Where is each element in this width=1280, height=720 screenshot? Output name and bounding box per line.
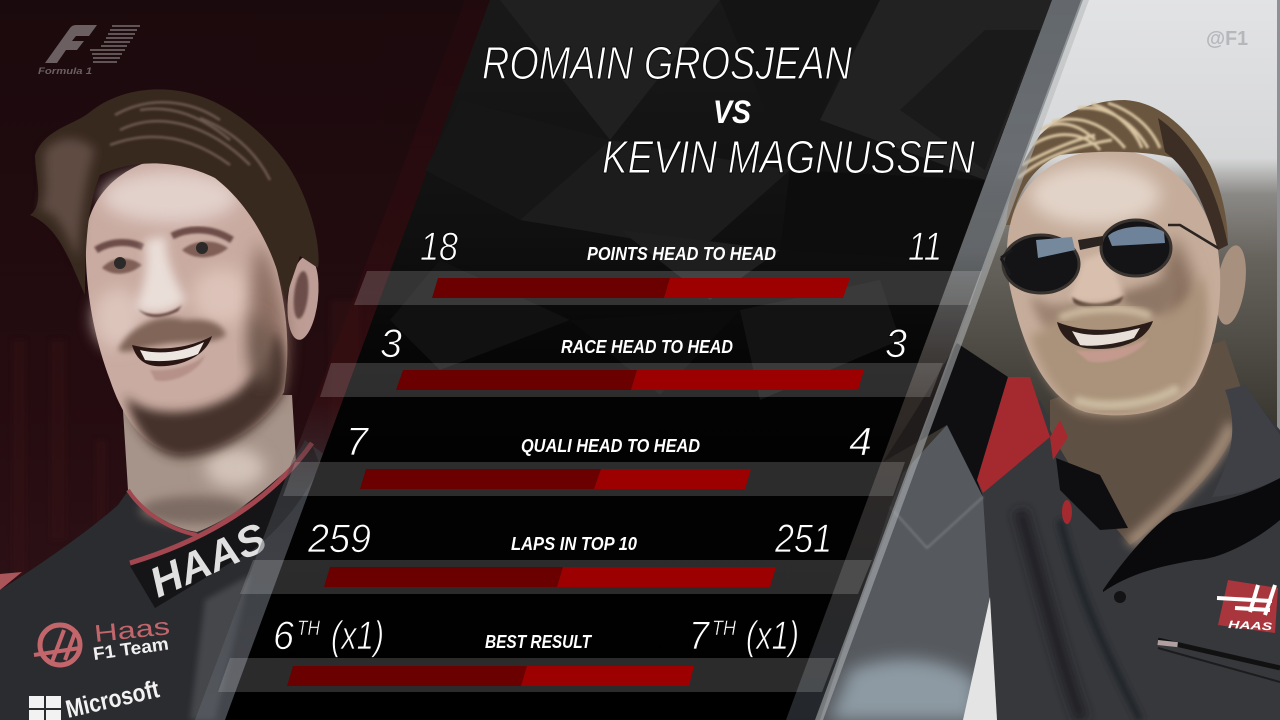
ear xyxy=(284,255,322,341)
row: laps in top 10: LAPS IN TOP 10 xyxy=(511,534,637,554)
logo: Formula 1: Formula 1 xyxy=(38,66,92,77)
sunglasses xyxy=(1001,220,1218,293)
chest logo xyxy=(1217,580,1278,633)
row: race head to head: 3 xyxy=(885,322,907,366)
hair xyxy=(30,89,319,300)
row: points head to head: 18 xyxy=(420,225,459,269)
ear xyxy=(1212,243,1250,327)
neck xyxy=(122,395,296,532)
row: quali head to head: QUALI HEAD TO HEAD xyxy=(521,436,700,456)
neck xyxy=(1050,340,1245,545)
row: quali head to head: 4 xyxy=(849,420,872,464)
row: best result: 6 xyxy=(273,614,295,658)
row: race head to head xyxy=(320,322,943,397)
suit logo: Microsoft xyxy=(29,675,162,720)
brows xyxy=(96,230,232,250)
row: best result: (x1) xyxy=(331,614,384,658)
row: laps in top 10 xyxy=(240,517,872,594)
right light strip xyxy=(815,0,1089,720)
title: Kevin Magnussen: KEVIN MAGNUSSEN xyxy=(602,131,976,183)
row: best result: TH xyxy=(297,617,321,640)
red shoulder patch xyxy=(977,377,1050,493)
hair xyxy=(1006,100,1228,250)
row: points head to head xyxy=(354,225,982,305)
row: best result: TH xyxy=(712,617,737,640)
black shoulder xyxy=(883,343,1008,497)
title: VS: VS xyxy=(713,94,752,130)
face xyxy=(1007,150,1220,415)
row: best result: 7 xyxy=(689,614,711,658)
mouth xyxy=(1057,321,1153,349)
right translucent band xyxy=(786,0,1083,720)
suit logo: team badge: Haas xyxy=(93,613,171,648)
suit logo: team badge: F1 Team xyxy=(92,634,170,664)
nose xyxy=(136,236,186,313)
suit logo: HAAS collar: HAAS xyxy=(143,514,273,606)
title: Romain Grosjean: ROMAIN GROSJEAN xyxy=(482,37,853,89)
nose xyxy=(1070,250,1124,303)
row: points head to head: POINTS HEAD TO HEAD xyxy=(587,244,776,264)
row: laps in top 10: 251 xyxy=(774,517,832,561)
polo collars xyxy=(1056,458,1128,530)
row: best result xyxy=(218,614,835,692)
left translucent band xyxy=(195,0,497,720)
portrait: Kevin Magnussen xyxy=(780,0,1280,720)
logo: Formula 1 xyxy=(38,25,140,77)
chest logo: HAAS xyxy=(1228,619,1273,633)
stubble and beard xyxy=(118,318,226,352)
collar xyxy=(130,445,320,608)
portrait: Romain Grosjean xyxy=(0,0,500,720)
row: points head to head: 11 xyxy=(908,225,942,269)
sleeve xyxy=(820,425,997,720)
row: quali head to head: 7 xyxy=(346,420,370,464)
face xyxy=(86,158,287,454)
row: race head to head: RACE HEAD TO HEAD xyxy=(561,337,733,357)
row: best result: (x1) xyxy=(746,614,799,658)
beard xyxy=(1030,275,1206,416)
row: quali head to head xyxy=(283,420,905,496)
mouth xyxy=(132,336,212,366)
central panel xyxy=(225,0,1052,720)
row: race head to head: 3 xyxy=(380,322,402,366)
shirt xyxy=(960,395,1280,720)
eyes xyxy=(102,241,228,274)
race suit xyxy=(0,440,340,720)
handle: @F1: @F1 xyxy=(1206,28,1248,50)
row: best result: BEST RESULT xyxy=(485,632,593,652)
suit logo: team badge xyxy=(34,613,171,665)
row: laps in top 10: 259 xyxy=(307,517,371,561)
